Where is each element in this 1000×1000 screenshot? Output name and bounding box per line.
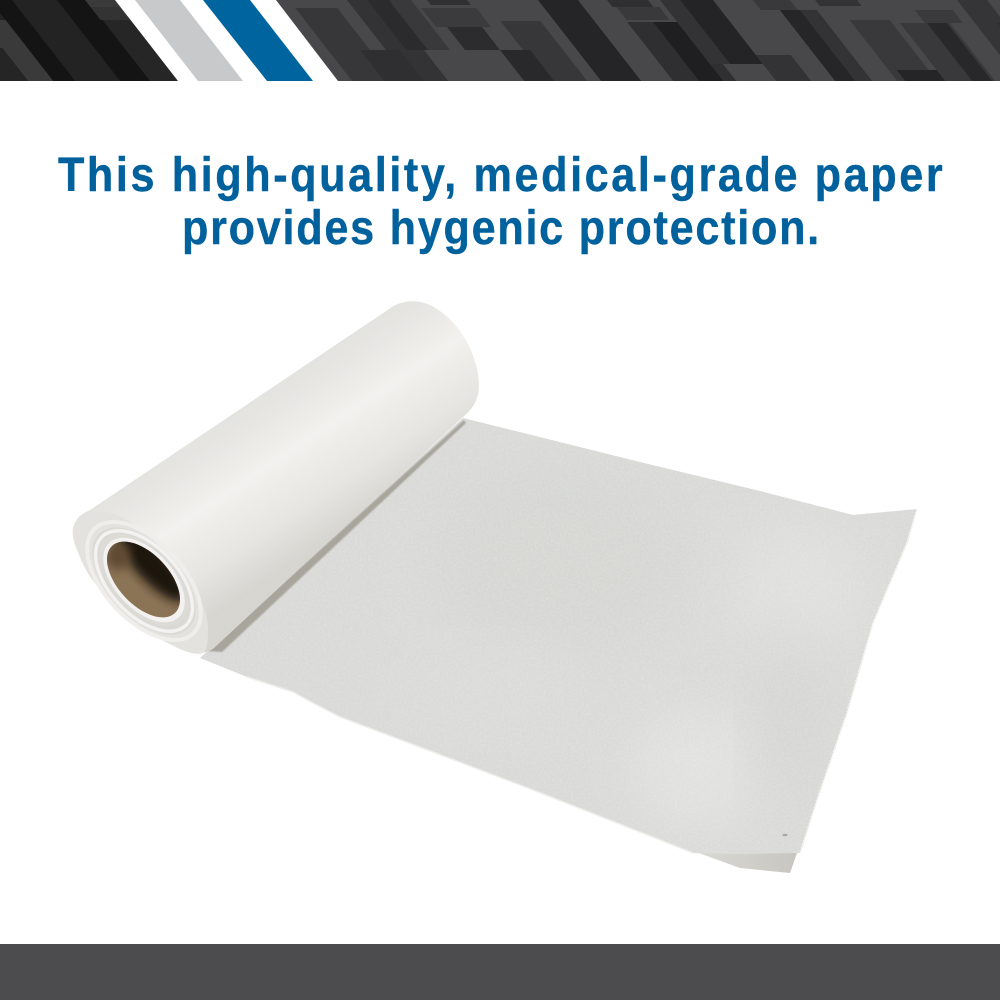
sheet: unrolled paper: [190, 410, 930, 880]
footer bar: [0, 944, 1000, 1000]
title: two-line blue heading: provides hygenic protection.: [182, 201, 819, 255]
header banner: angled dark pattern with grey and blue stripes: [0, 0, 1000, 81]
title: two-line blue heading: [58, 148, 943, 255]
roll: paper cylinder: [60, 295, 485, 660]
roll end face: wound paper rings: [77, 514, 208, 654]
cardboard core: [107, 542, 180, 618]
illustration: paper roll with unrolled sheet: [72, 301, 918, 873]
roll shadow on the sheet: [208, 420, 466, 652]
title: two-line blue heading: This high-quality, medical-grade paper: [58, 148, 943, 202]
